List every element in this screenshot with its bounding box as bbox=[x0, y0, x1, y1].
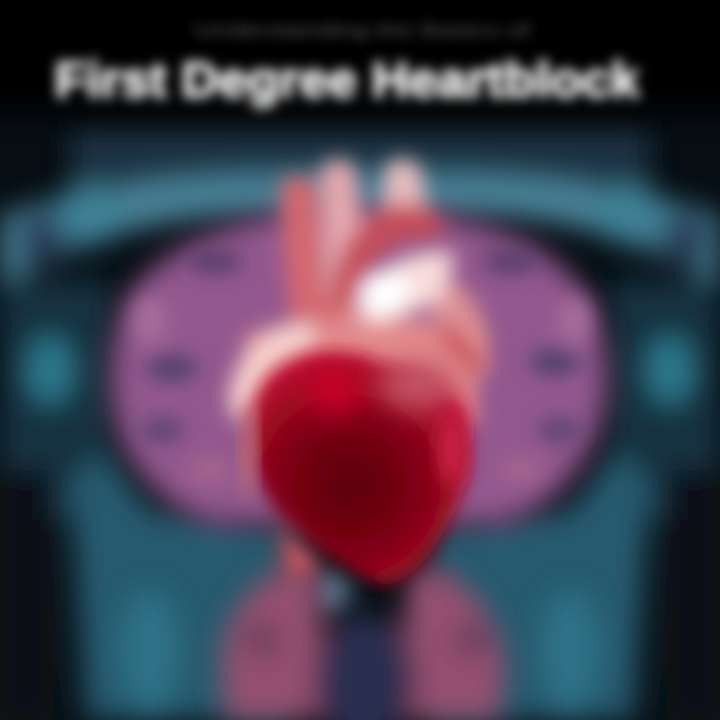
lower lungs: pink vessels and central dark organ bbox=[220, 565, 505, 720]
subtitle: Understanding the Basics of bbox=[194, 21, 530, 40]
top dark fade bbox=[0, 0, 720, 115]
heart: bright highlights on upper body bbox=[228, 251, 487, 425]
heart bbox=[228, 158, 488, 585]
heart: crimson glow at top left bbox=[307, 366, 363, 414]
heart: great vessels bbox=[280, 158, 488, 378]
chest: ribs lower detail bbox=[120, 572, 600, 710]
heart: red ventricle body bbox=[251, 352, 471, 585]
heart: salmon shading at upper right bbox=[378, 361, 458, 409]
heart: crimson right edge bbox=[440, 414, 464, 486]
lung texture bbox=[134, 251, 591, 482]
title: First Degree Heartblock bbox=[54, 52, 640, 108]
lungs: pink-purple upper pair bbox=[110, 205, 608, 525]
heart: descending vessel at bottom bbox=[278, 525, 318, 578]
heart: pale left rim bbox=[240, 402, 256, 498]
